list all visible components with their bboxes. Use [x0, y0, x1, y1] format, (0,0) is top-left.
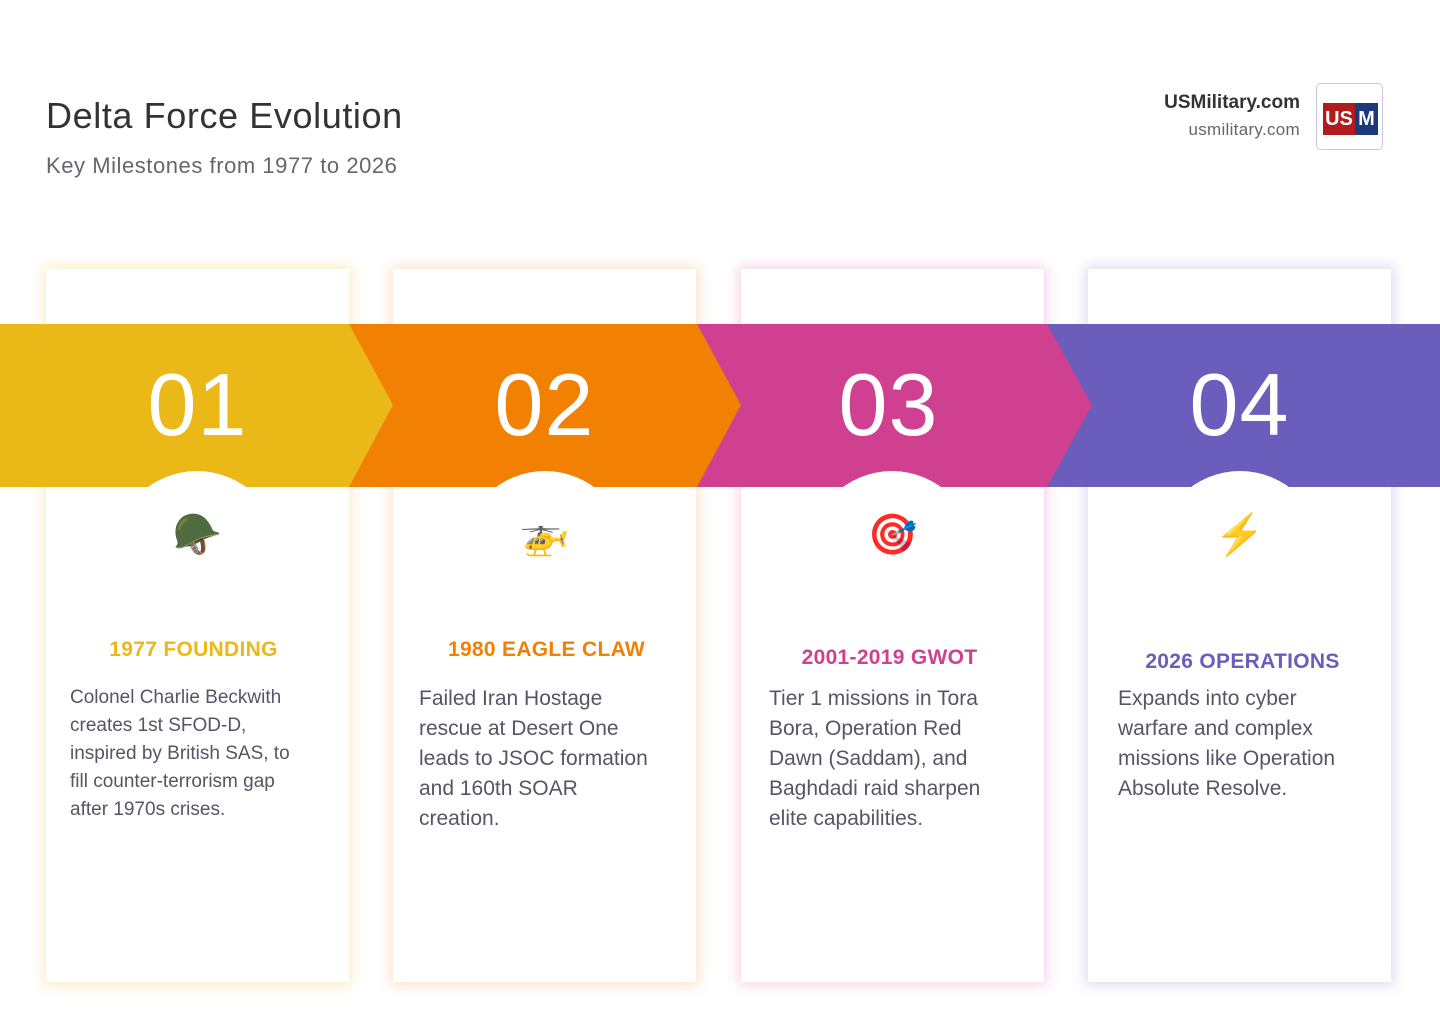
subtitle: Key Milestones from 1977 to 2026 [46, 153, 397, 178]
icon: helicopter: 🚁 [520, 511, 569, 558]
icon: lightning: ⚡ [1215, 511, 1264, 558]
milestone 3 text: Tier 1 missions in Tora Bora, Operation Red Dawn (Saddam), and Baghdadi raid sharpen elite capabilities. [769, 687, 980, 830]
card 3 [741, 269, 1044, 982]
card 4 [1088, 269, 1391, 982]
milestone 1 title: 1977 FOUNDING [109, 638, 278, 661]
milestone 4 title: 2026 OPERATIONS [1145, 650, 1340, 673]
brand text [1164, 92, 1300, 139]
step numbers: 03 [839, 355, 938, 454]
milestone 3 title: 2001-2019 GWOT [802, 646, 977, 669]
logo: M [1358, 108, 1375, 130]
milestone 4 text: Expands into cyber warfare and complex missions like Operation Absolute Resolve. [1118, 687, 1335, 800]
brand text: USMilitary.com [1164, 92, 1300, 113]
icon: helmet: 🪖 [173, 511, 222, 558]
icon: target: 🎯 [868, 511, 917, 558]
title: Delta Force Evolution [46, 95, 403, 136]
milestone 2 text: Failed Iran Hostage rescue at Desert One leads to JSOC formation and 160th SOAR creation. [419, 687, 648, 830]
card 1 [46, 269, 349, 982]
step numbers: 02 [495, 355, 594, 454]
card 2 [393, 269, 696, 982]
brand text: usmilitary.com [1188, 120, 1300, 139]
logo: US [1325, 108, 1353, 130]
step numbers: 01 [148, 355, 247, 454]
step numbers [148, 355, 1289, 454]
logo [1316, 83, 1383, 150]
step numbers: 04 [1190, 355, 1289, 454]
milestone 2 title: 1980 EAGLE CLAW [448, 638, 645, 661]
milestone 1 text: Colonel Charlie Beckwith creates 1st SFOD-D, inspired by British SAS, to fill counter-terrorism gap after 1970s crises. [70, 687, 290, 820]
